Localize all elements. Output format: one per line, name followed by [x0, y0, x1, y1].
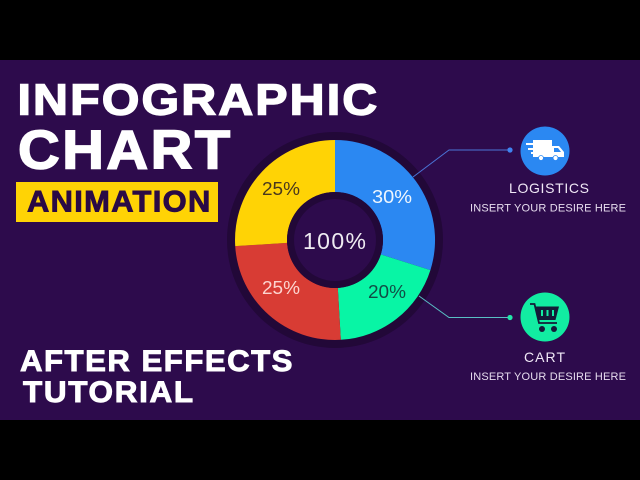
purple background panel [0, 60, 640, 420]
subtitle: after effects tutorial: TUTORIAL [23, 375, 193, 409]
label: 25% red: 25% [262, 278, 300, 298]
segment: red 25% [235, 243, 341, 340]
connector line: cart [419, 296, 513, 320]
icon: logistics truck [520, 126, 570, 176]
segment: blue 30% [335, 140, 435, 270]
title: infographic chart [18, 75, 377, 180]
label: 25% yellow: 25% [262, 179, 300, 199]
segment: green 20% [338, 254, 430, 340]
text: cart description: INSERT YOUR DESIRE HERE [470, 371, 626, 383]
subtitle: after effects tutorial [20, 345, 292, 409]
donut chart [227, 132, 443, 348]
center hole [287, 192, 383, 288]
segment: yellow 25% [235, 140, 335, 246]
label: 30%: 30% [372, 187, 412, 207]
subtitle: after effects tutorial: AFTER EFFECTS [20, 345, 292, 378]
badge: animation: ANIMATION [27, 185, 210, 218]
icon: shopping cart [520, 292, 570, 342]
label: cart: CART [524, 349, 565, 365]
title: infographic chart: INFOGRAPHIC [18, 75, 377, 124]
connector line: logistics [413, 147, 513, 177]
label: 20%: 20% [368, 282, 406, 302]
title: infographic chart: CHART [18, 119, 230, 180]
label: logistics: LOGISTICS [509, 180, 589, 196]
text: logistics description: INSERT YOUR DESIRE HERE [470, 202, 626, 214]
label: 100%: 100% [303, 228, 366, 254]
